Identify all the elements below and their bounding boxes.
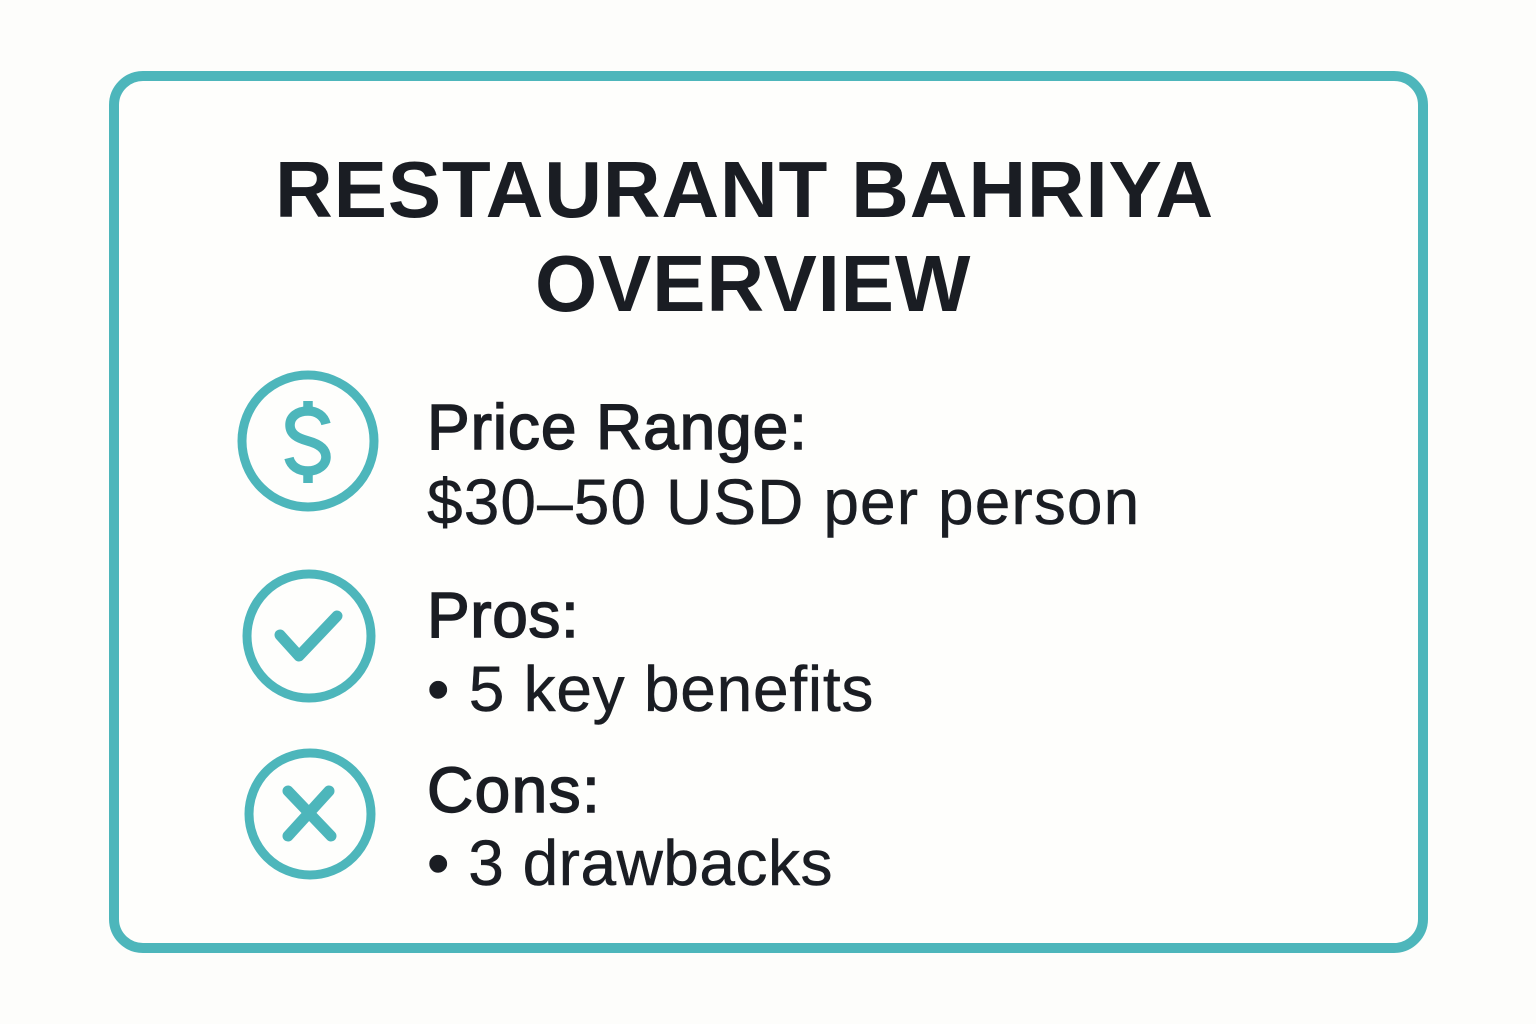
text block: pros — [427, 579, 874, 725]
title: OVERVIEW — [535, 239, 971, 328]
text block: cons — [427, 754, 833, 899]
text block: price range — [427, 391, 1140, 538]
text block: price range: $30–50 USD per person — [427, 466, 1140, 538]
title — [275, 145, 1214, 328]
text block: price range: Price Range: — [427, 391, 808, 463]
text block: pros: Pros: — [427, 579, 579, 651]
icon: cross — [244, 748, 376, 880]
icon: check — [242, 570, 376, 702]
title: RESTAURANT BAHRIYA — [275, 145, 1214, 234]
text block: pros: • 5 key benefits — [427, 653, 874, 725]
text block: cons: • 3 drawbacks — [427, 827, 833, 899]
icon: dollar — [238, 370, 378, 512]
text block: cons: Cons: — [427, 754, 601, 826]
panel: overview card — [109, 71, 1428, 953]
